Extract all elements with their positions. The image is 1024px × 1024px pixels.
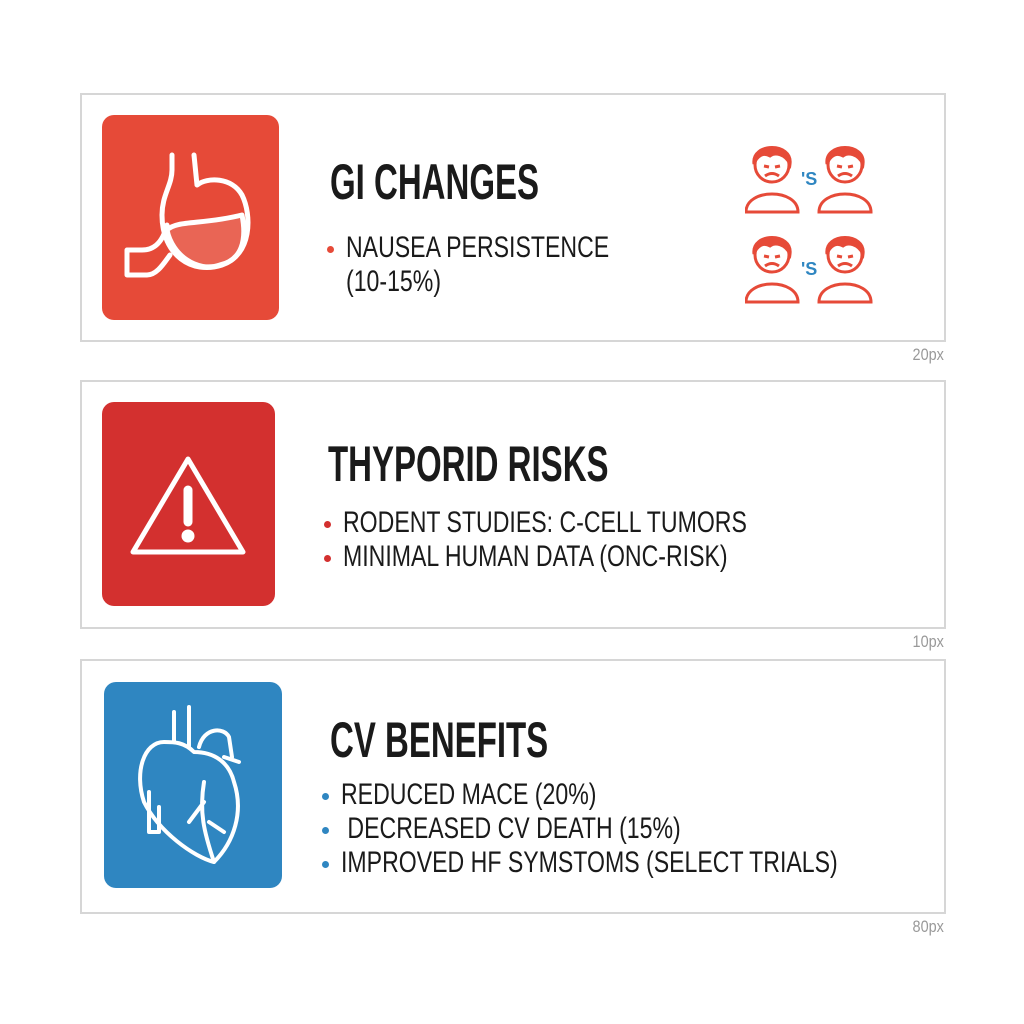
icon: warning: [102, 402, 275, 606]
bullet list: MINIMAL HUMAN DATA (ONC-RISK): [343, 540, 728, 573]
icon: heart: [104, 682, 282, 888]
title: GI CHANGES: [330, 154, 539, 210]
bullet list: RODENT STUDIES: C-CELL TUMORS: [343, 506, 747, 539]
bullet list: [324, 506, 747, 573]
icon: people nausea: 'S: [801, 259, 817, 279]
panel: CV benefits: [80, 659, 946, 914]
bullet list: REDUCED MACE (20%): [341, 778, 596, 811]
bullet list: (10-15%): [346, 265, 441, 298]
title: THYPORID RISKS: [328, 436, 609, 492]
panel: thyroid risks: [80, 380, 946, 629]
bullet list: DECREASED CV DEATH (15%): [347, 812, 681, 845]
bullet list: [327, 231, 609, 298]
bullet list: NAUSEA PERSISTENCE: [346, 231, 609, 264]
icon: people nausea: 'S: [801, 169, 817, 189]
bullet list: [322, 778, 838, 879]
icon: people nausea: [745, 146, 872, 304]
label: 20px: 20px: [913, 345, 944, 364]
bullet list: IMPROVED HF SYMSTOMS (SELECT TRIALS): [341, 846, 838, 879]
label: 10px: 10px: [913, 632, 944, 651]
icon: stomach: [102, 115, 279, 320]
label: 80px: 80px: [913, 917, 944, 936]
panel: GI changes: [80, 93, 946, 342]
title: CV BENEFITS: [330, 712, 548, 768]
